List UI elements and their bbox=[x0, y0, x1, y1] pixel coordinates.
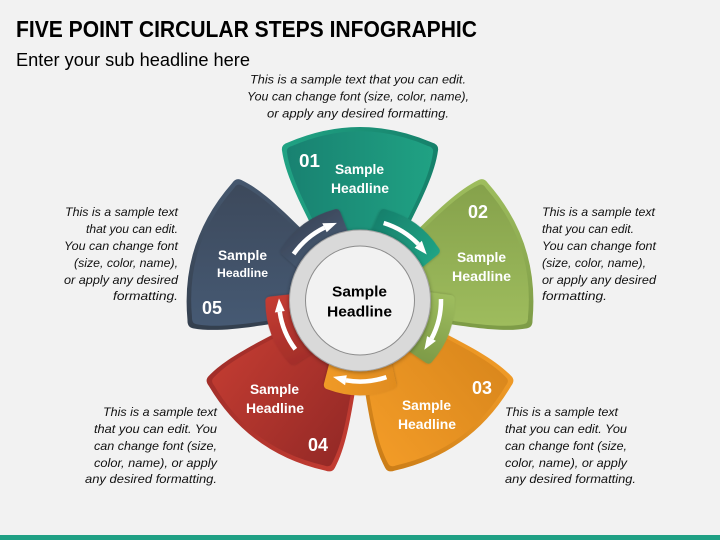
step 03 labels: Headline bbox=[398, 417, 456, 432]
text block: step 03 bbox=[505, 405, 636, 486]
step 04 labels: Sample bbox=[250, 382, 299, 397]
petal 02: green bbox=[395, 173, 549, 356]
text block: step 05: This is a sample text bbox=[65, 205, 179, 219]
text block: step 05: or apply any desired bbox=[64, 273, 178, 287]
bottom accent bar bbox=[0, 535, 720, 540]
step 03 labels bbox=[398, 378, 492, 432]
text block: step 04: any desired formatting. bbox=[85, 472, 217, 486]
step 04 labels bbox=[246, 382, 328, 455]
step 05 labels: Sample bbox=[218, 248, 267, 263]
step 04 labels: 04 bbox=[308, 435, 328, 455]
text block: step 05 bbox=[64, 205, 179, 303]
step 05 labels: Headline bbox=[217, 266, 268, 280]
text block: step 05: formatting. bbox=[113, 289, 178, 303]
step 01 labels: Sample bbox=[335, 162, 384, 177]
text block: step 03: color, name), or apply bbox=[505, 456, 628, 470]
text block: step 03: that you can edit. You bbox=[505, 422, 627, 436]
text block: step 03: This is a sample text bbox=[505, 405, 619, 419]
text block: step 02: or apply any desired bbox=[542, 273, 656, 287]
step 02 labels: 02 bbox=[468, 202, 488, 222]
text block: step 01 bbox=[247, 72, 469, 120]
center headline bbox=[327, 284, 392, 320]
title: FIVE POINT CIRCULAR STEPS INFOGRAPHIC bbox=[16, 16, 477, 42]
center ring bbox=[290, 230, 430, 371]
text block: step 03: can change font (size, bbox=[505, 439, 627, 453]
arrow tab: red, pointing to step 05 bbox=[258, 288, 317, 368]
text block: step 01: You can change font (size, color, name), bbox=[247, 90, 469, 104]
text block: step 05: (size, color, name), bbox=[74, 256, 178, 270]
arrow tab: green, pointing to step 03 bbox=[404, 287, 462, 367]
text block: step 03: any desired formatting. bbox=[505, 472, 636, 486]
petal 05: slate blue bbox=[171, 173, 325, 356]
step 02 labels: Sample bbox=[457, 250, 506, 265]
center headline: Sample bbox=[332, 284, 387, 300]
step 01 labels bbox=[299, 151, 389, 196]
step 01 labels: 01 bbox=[299, 151, 320, 171]
text block: step 02: formatting. bbox=[542, 289, 607, 303]
petal 04: red bbox=[195, 305, 387, 487]
arrow tab: orange, pointing to step 04 bbox=[324, 360, 396, 396]
arrow tab: slate, pointing to step 01 bbox=[275, 202, 354, 273]
text block: step 02: You can change font bbox=[542, 239, 657, 253]
step 02 labels bbox=[452, 202, 512, 284]
text block: step 04: can change font (size, bbox=[94, 439, 217, 453]
text block: step 04: color, name), or apply bbox=[94, 456, 218, 470]
petal 03: orange bbox=[333, 305, 525, 487]
step 02 labels: Headline bbox=[452, 269, 512, 284]
petal 01: teal bbox=[282, 127, 438, 238]
text block: step 05: that you can edit. bbox=[86, 222, 178, 236]
step 01 labels: Headline bbox=[331, 181, 389, 196]
step 05 labels: 05 bbox=[202, 298, 222, 318]
text block: step 04: that you can edit. You bbox=[94, 422, 217, 436]
step 04 labels: Headline bbox=[246, 401, 304, 416]
text block: step 02: that you can edit. bbox=[542, 222, 634, 236]
text block: step 04: This is a sample text bbox=[103, 405, 218, 419]
sub headline: Enter your sub headline here bbox=[16, 50, 250, 70]
text block: step 02: This is a sample text bbox=[542, 205, 656, 219]
step 03 labels: Sample bbox=[402, 398, 451, 413]
step 03 labels: 03 bbox=[472, 378, 492, 398]
arrow tab: teal, pointing to step 02 bbox=[366, 202, 445, 273]
text block: step 02 bbox=[542, 205, 657, 303]
text block: step 01: or apply any desired formatting. bbox=[267, 106, 449, 120]
text block: step 02: (size, color, name), bbox=[542, 256, 646, 270]
text block: step 05: You can change font bbox=[64, 239, 179, 253]
center headline: Headline bbox=[327, 304, 392, 320]
text block: step 01: This is a sample text that you can edit. bbox=[250, 72, 466, 86]
step 05 labels bbox=[202, 248, 268, 318]
text block: step 04 bbox=[85, 405, 218, 486]
